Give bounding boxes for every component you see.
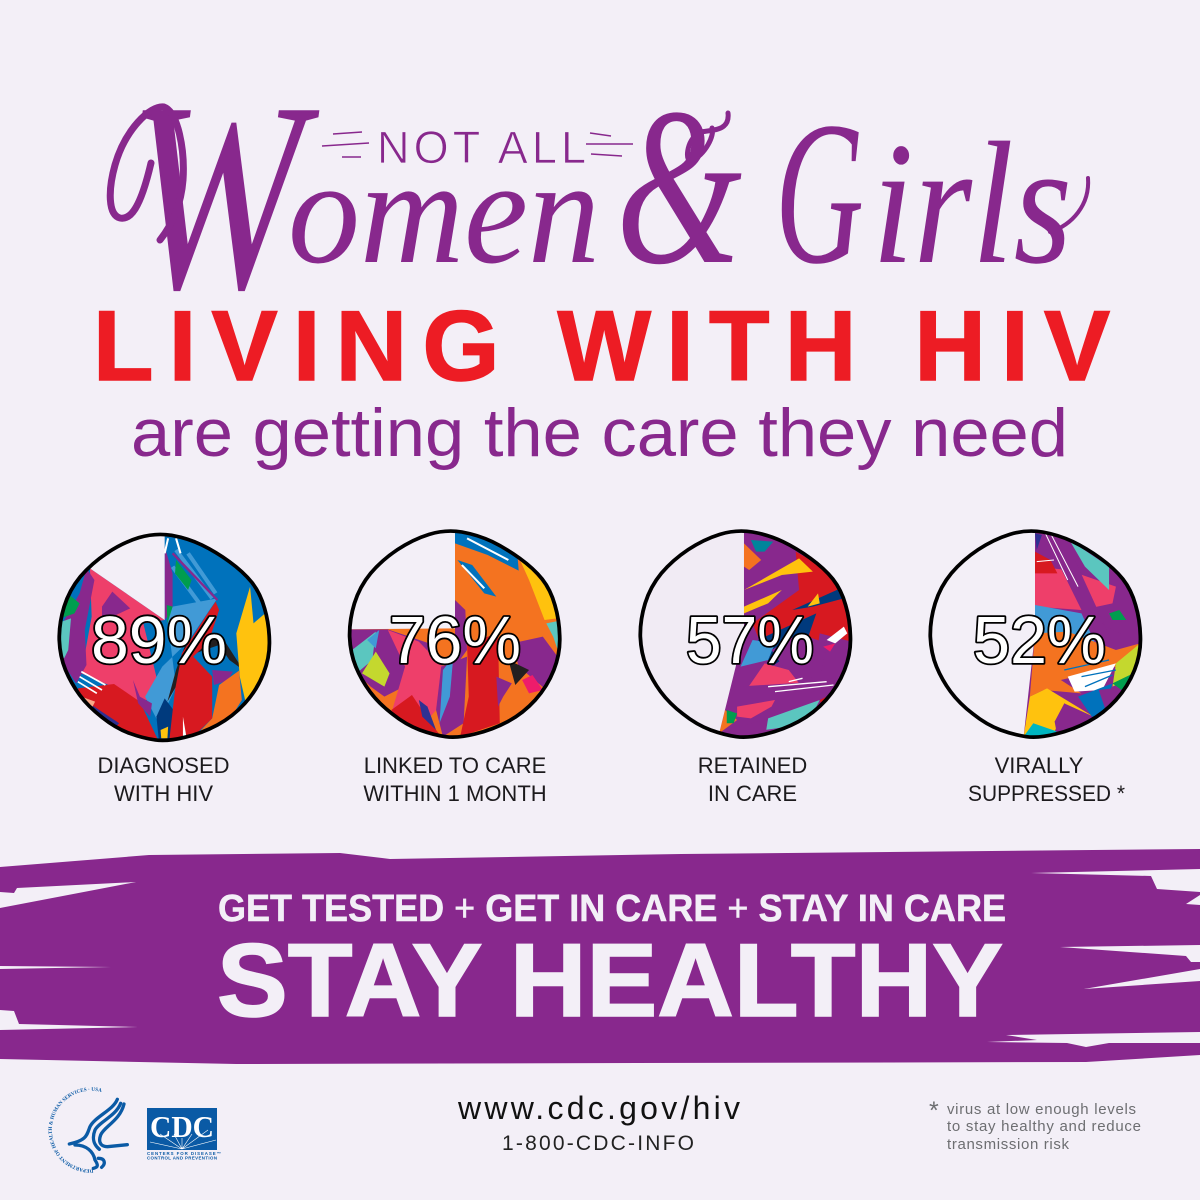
outline	[350, 531, 560, 737]
speed lines	[322, 132, 633, 157]
script: Girls: G	[775, 79, 864, 307]
website: www.cdc.gov/hiv	[457, 1090, 740, 1126]
logo: HHS seal	[48, 1087, 129, 1173]
cdc blue square	[147, 1108, 217, 1150]
chart: 76% linked to care	[348, 529, 562, 801]
banner line 1: GET TESTED + GET IN CARE + STAY IN CARE	[218, 888, 1006, 930]
chart: 57% retained	[638, 529, 852, 801]
not all: NOT ALL	[377, 122, 586, 173]
label: SUPPRESSED *	[968, 781, 1125, 806]
cdc caption: CENTERS FOR DISEASE™	[147, 1151, 221, 1156]
outline	[930, 531, 1140, 737]
script: Girls	[775, 79, 1072, 307]
value: 76%	[389, 603, 521, 678]
brush shape	[0, 849, 1200, 1064]
label: WITHIN 1 MONTH	[363, 781, 547, 806]
label: RETAINED	[698, 753, 807, 778]
asterisk: *	[929, 1097, 939, 1125]
value: 52%	[973, 603, 1106, 678]
footnote text: to stay healthy and reduce	[947, 1118, 1141, 1135]
label: VIRALLY	[995, 753, 1084, 778]
seal ring text: DEPARTMENT OF HEALTH & HUMAN SERVICES · USA	[48, 1087, 102, 1173]
label: IN CARE	[708, 781, 797, 806]
footnote text: virus at low enough levels	[947, 1101, 1136, 1118]
logo: CDC	[147, 1108, 221, 1160]
pie art 89	[57, 532, 272, 742]
footnote	[929, 1097, 1141, 1153]
outline	[640, 531, 850, 737]
cdc caption: CONTROL AND PREVENTION	[147, 1156, 217, 1160]
rays	[150, 1130, 216, 1149]
phone: 1-800-CDC-INFO	[502, 1132, 694, 1155]
flourishes	[110, 107, 1088, 240]
chart: 89% diagnosed	[57, 532, 272, 801]
banner: brush stroke	[0, 849, 1200, 1064]
script: Women: W	[128, 47, 319, 346]
footnote text: transmission risk	[947, 1136, 1070, 1153]
script: Girls: irls	[872, 106, 1072, 300]
value: 57%	[686, 603, 814, 678]
script: Women: omen	[288, 129, 600, 295]
pie art 57	[638, 529, 852, 739]
label: WITH HIV	[114, 781, 213, 806]
label: DIAGNOSED	[97, 753, 230, 778]
heading: living with hiv: LIVING WITH HIV	[93, 290, 1110, 401]
cdc letters: CDC	[150, 1109, 214, 1144]
banner line 2: STAY HEALTHY	[217, 923, 1003, 1039]
value: 89%	[91, 603, 227, 678]
chart: 52% virally suppressed	[928, 529, 1142, 801]
eagle	[69, 1099, 127, 1168]
pie art 52	[928, 529, 1142, 739]
title: script lettering	[110, 47, 1088, 346]
outline	[59, 534, 269, 740]
pie art 76	[348, 529, 562, 739]
subheading: are getting the care they need	[131, 395, 1068, 471]
script: Women	[128, 47, 600, 346]
label: LINKED TO CARE	[364, 753, 546, 778]
script: ampersand: &	[616, 62, 742, 311]
